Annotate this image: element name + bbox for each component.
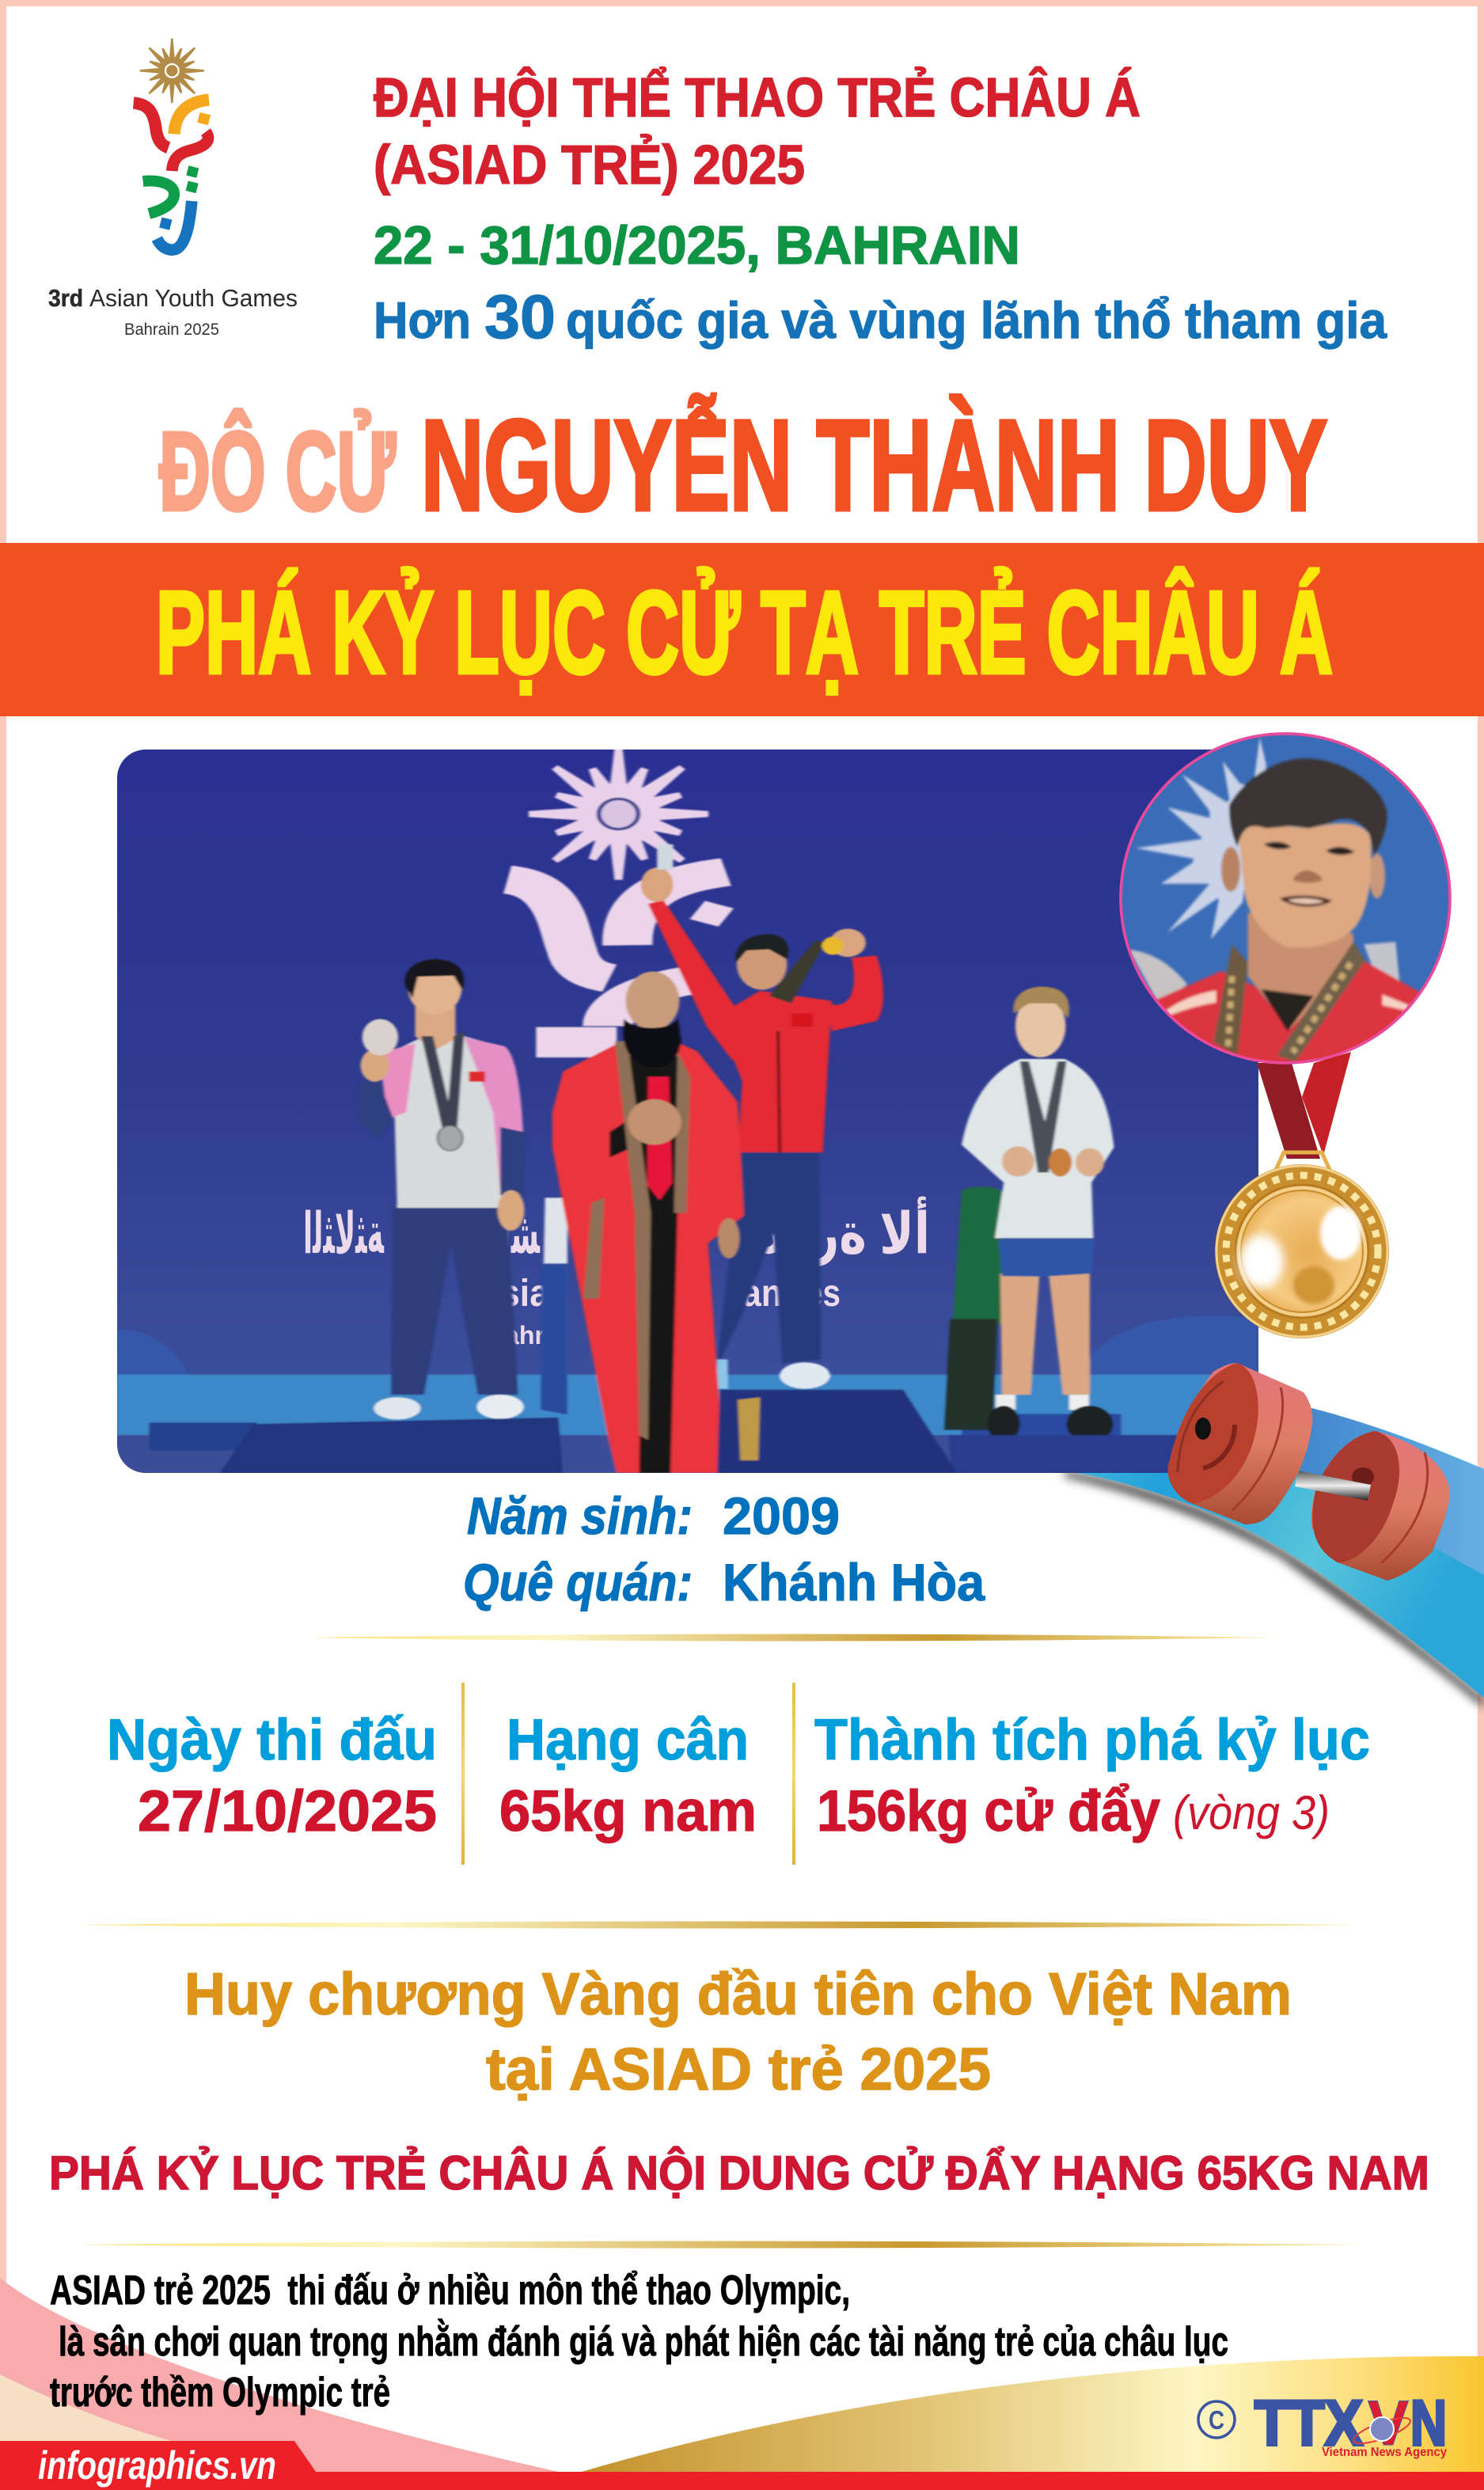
portrait image: [1118, 731, 1456, 1066]
TTXVN wordmark: N: [1410, 2388, 1447, 2459]
logo sub caption: Bahrain 2025: [124, 321, 219, 339]
body text: [50, 2268, 1228, 2416]
TTXVN wordmark: V: [1368, 2388, 1409, 2459]
copyright and TTXVN logo: [1198, 2388, 1447, 2459]
stage blue bumps: [117, 1315, 1258, 1377]
stage floor: [117, 1375, 1258, 1435]
copyright mark: C: [1209, 2405, 1224, 2435]
backdrop text: ahr: [505, 1321, 545, 1349]
backdrop emblem: [507, 872, 726, 1042]
portrait ring: [1121, 734, 1450, 1063]
hometown: Khánh Hòa: [723, 1553, 985, 1611]
banner: record headline: [0, 543, 1484, 716]
photo backdrop: [117, 750, 1258, 1473]
logo: 3rd Asian Youth Games: [48, 39, 298, 339]
site label: infographics.vn: [38, 2443, 276, 2488]
icon: sun: [140, 39, 204, 103]
title prefix: ĐÔ CỬ: [159, 408, 396, 533]
label: Thành tích phá kỷ lục: [814, 1708, 1370, 1772]
bystander lower: [541, 1263, 567, 1415]
logo caption: 3rd: [48, 284, 83, 312]
gold medalist: [641, 845, 883, 1389]
text: quốc gia và vùng lãnh thổ tham gia: [566, 291, 1387, 349]
logo emblem: [134, 39, 211, 250]
heading line 2: (ASIAD TRẺ) 2025: [374, 134, 805, 195]
footer decoration: pink corner: [0, 2278, 559, 2472]
person in green: [943, 1186, 1002, 1430]
agency name: Vietnam News Agency: [1322, 2446, 1447, 2459]
heading: event name: [374, 66, 1141, 195]
backdrop text: es: [805, 1273, 841, 1315]
round note: (vòng 3): [1173, 1786, 1330, 1839]
portrait of athlete: [1118, 731, 1456, 1066]
backdrop sun: [529, 749, 708, 879]
line 2: tại ASIAD trẻ 2025: [486, 2036, 991, 2102]
copyright mark: [1198, 2401, 1235, 2438]
label: Ngày thi đấu: [107, 1708, 437, 1772]
stats row: [107, 1683, 1370, 1865]
participating nations: [374, 282, 1387, 351]
medal ribbon: [1257, 1052, 1351, 1159]
decorative blue swoosh: [1065, 1393, 1484, 1708]
medal disc: [1215, 1164, 1389, 1338]
photo: medal ceremony: ﺔﺜﻟﺎﺜﻟﺍ: [303, 1202, 385, 1266]
podiums: [218, 1390, 1262, 1475]
dumbbell: [1167, 1363, 1450, 1581]
dumbbell bar: [1295, 1471, 1371, 1501]
right plate: [1311, 1431, 1450, 1581]
value: 65kg nam: [499, 1779, 757, 1843]
left plate: [1167, 1363, 1312, 1524]
event dates and place: 22 - 31/10/2025, BAHRAIN: [374, 215, 1020, 275]
globe: [1351, 2413, 1413, 2448]
silver medalist: [359, 959, 525, 1419]
backdrop text: an: [742, 1273, 782, 1315]
text: Hơn: [374, 291, 471, 349]
line 3: trước thềm Olympic trẻ: [50, 2370, 390, 2416]
hometown label: Quê quán:: [463, 1553, 693, 1611]
column: match date: [107, 1708, 437, 1843]
heading line 1: ĐẠI HỘI THỂ THAO TRẺ CHÂU Á: [374, 66, 1141, 128]
banner background: [0, 543, 1484, 716]
TTXVN wordmark: [1254, 2388, 1447, 2459]
TTXVN wordmark: TTX: [1254, 2388, 1363, 2459]
footer red bar: [0, 2441, 1484, 2490]
backdrop logo text, Arabic: ﺃﻻ ﺓﺭﻭﺩ: [760, 1196, 930, 1267]
medal loop: [1276, 1152, 1330, 1170]
value: 156kg cử đẩy: [817, 1779, 1160, 1843]
footer decoration: peach corner: [0, 2374, 174, 2472]
scene drawing: [117, 749, 1262, 1475]
backdrop text: sia: [500, 1273, 549, 1315]
athlete info: [463, 1486, 985, 1611]
record statement: PHÁ KỶ LỤC TRẺ CHÂU Á NỘI DUNG CỬ ĐẨY HẠNG 65KG NAM: [49, 2146, 1429, 2200]
label: Hạng cân: [507, 1708, 749, 1772]
stage bar: [962, 1414, 1122, 1435]
column: record: [814, 1708, 1370, 1843]
birth year: 2009: [723, 1486, 840, 1545]
official in red robe: [552, 972, 744, 1473]
backdrop text: ﺸﻟ: [500, 1202, 540, 1266]
footer decoration: gold swoosh: [582, 2356, 1484, 2472]
birth year label: Năm sinh:: [467, 1486, 693, 1545]
line 1: ASIAD trẻ 2025 thi đấu ở nhiều môn thể thao Olympic,: [50, 2268, 850, 2313]
stage lower floor: [117, 1435, 935, 1473]
column: weight class: [499, 1708, 757, 1843]
logo caption: Asian Youth Games: [89, 284, 298, 312]
main title: athlete name: [159, 393, 1327, 537]
line 1: Huy chương Vàng đầu tiên cho Việt Nam: [184, 1960, 1292, 2027]
number 30: 30: [484, 282, 556, 351]
photo: medal ceremony: [117, 749, 1262, 1475]
medal: [1215, 1052, 1389, 1338]
achievement heading: [184, 1960, 1292, 2102]
bystander: [541, 1198, 567, 1415]
value: 27/10/2025: [138, 1779, 437, 1843]
stage bar: [149, 1422, 256, 1450]
bronze medalist: [962, 987, 1114, 1442]
